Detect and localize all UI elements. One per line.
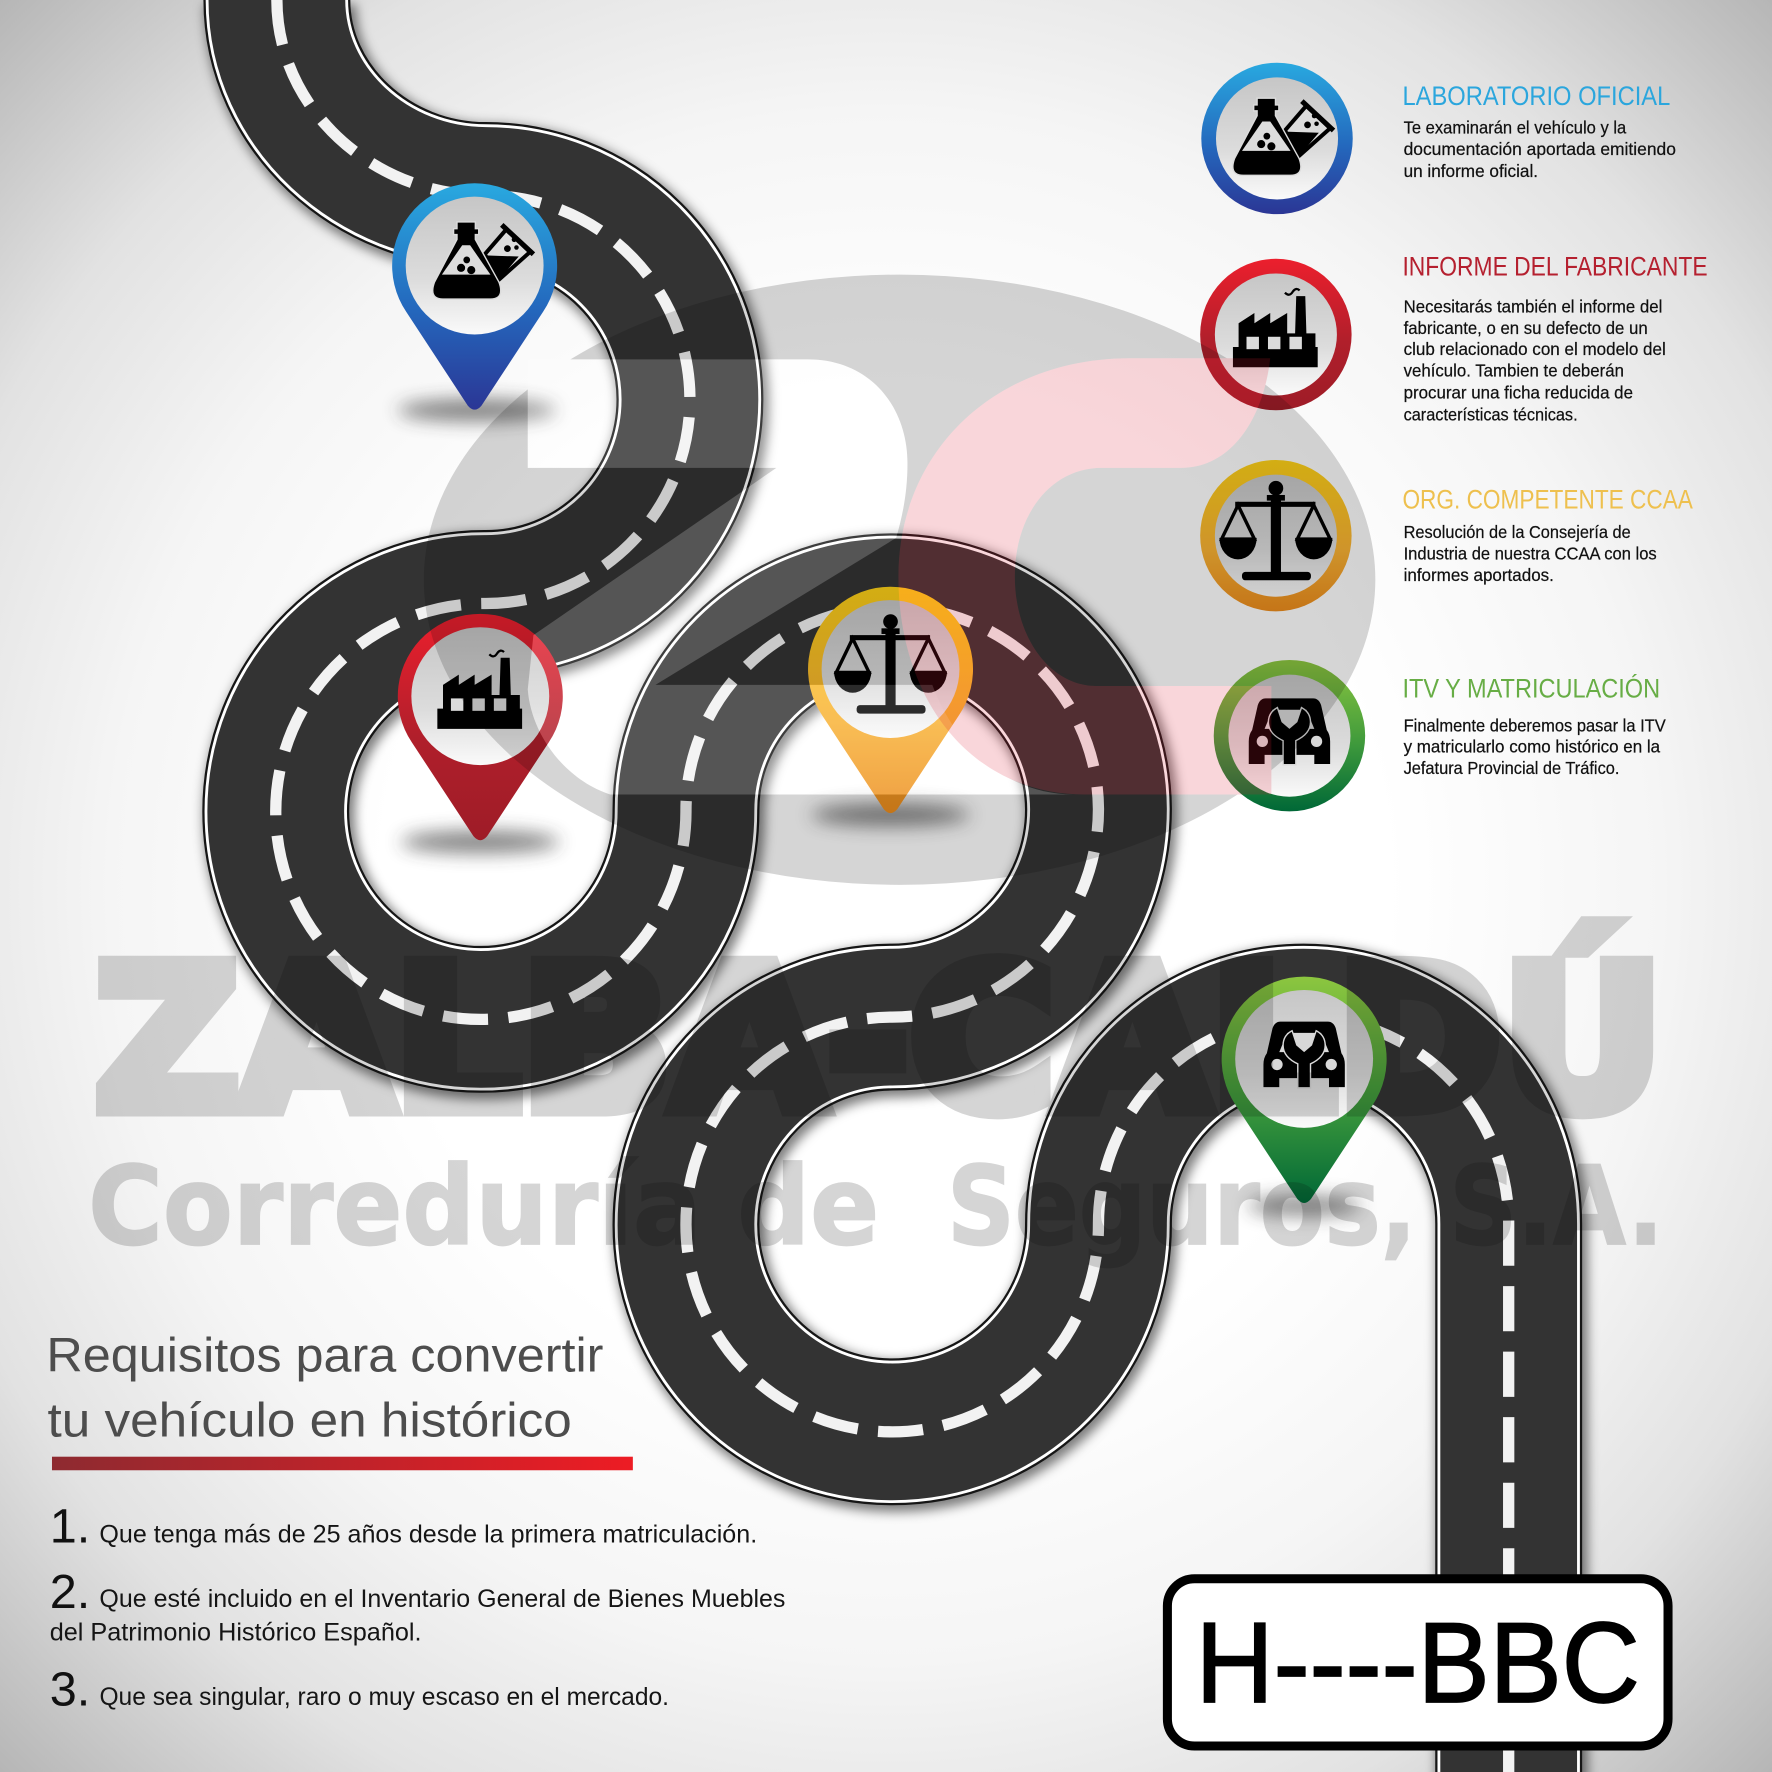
legend icon: fábrica — [1200, 259, 1352, 410]
legend icon: coche y llave — [1214, 660, 1365, 811]
text block: informe del fabricante: INFORME DEL FABRICANTE — [1402, 251, 1708, 282]
requirements list — [50, 1500, 785, 1716]
legend icon: laboratorio — [1201, 63, 1353, 214]
text block: laboratorio oficial: un informe oficial. — [1404, 161, 1538, 181]
text block: organismo competente: Resolución de la Consejería de — [1404, 522, 1631, 542]
pin: organismo competente — [808, 587, 973, 826]
text block: informe del fabricante — [1402, 251, 1708, 424]
requirements list: Que sea singular, raro o muy escaso en el mercado. — [99, 1683, 669, 1711]
requirements list: Que tenga más de 25 años desde la primera matriculación. — [99, 1521, 757, 1549]
text block: informe del fabricante: fabricante, o en su defecto de un — [1404, 318, 1648, 338]
heading: Requisitos para convertir — [46, 1329, 603, 1382]
text block: informe del fabricante: procurar una ficha reducida de — [1404, 382, 1633, 402]
text block: organismo competente: ORG. COMPETENTE CCAA — [1402, 484, 1694, 515]
requirements list: 1. — [50, 1500, 90, 1554]
watermark: company logo and name: Seguros, S.A. — [947, 1143, 1664, 1270]
licence plate: H----BBC — [1196, 1600, 1640, 1727]
heading: tu vehículo en histórico — [47, 1394, 572, 1447]
watermark: company logo and name: Correduría de — [88, 1143, 879, 1270]
text block: organismo competente — [1402, 484, 1694, 585]
pin: laboratorio oficial — [392, 183, 557, 422]
text block: ITV y matriculación: ITV Y MATRICULACIÓN — [1402, 672, 1660, 703]
text block: laboratorio oficial: LABORATORIO OFICIAL — [1402, 80, 1670, 111]
text block: laboratorio oficial — [1402, 80, 1676, 181]
text block: ITV y matriculación — [1402, 672, 1666, 778]
text block: organismo competente: informes aportados. — [1404, 565, 1554, 585]
heading — [46, 1329, 603, 1447]
watermark: company logo and name: ZALBA-CALDÚ — [95, 923, 1664, 1156]
legend icon: balanza — [1200, 460, 1352, 611]
text block: informe del fabricante: características técnicas. — [1404, 404, 1578, 424]
text block: ITV y matriculación: Jefatura Provincial de Tráfico. — [1404, 758, 1619, 778]
requirements list: 2. — [50, 1565, 90, 1619]
text block: informe del fabricante: vehículo. Tambien te deberán — [1404, 360, 1624, 380]
red divider bar — [52, 1457, 633, 1470]
text block: laboratorio oficial: documentación aportada emitiendo — [1404, 139, 1676, 159]
requirements list: 3. — [50, 1662, 90, 1716]
text block: organismo competente: Industria de nuestra CCAA con los — [1404, 543, 1657, 563]
requirements list: del Patrimonio Histórico Español. — [50, 1618, 422, 1646]
text block: informe del fabricante: club relacionado con el modelo del — [1404, 339, 1666, 359]
pin: ITV y matriculación — [1222, 977, 1387, 1216]
pin: informe del fabricante — [398, 614, 563, 853]
requirements list: Que esté incluido en el Inventario General de Bienes Muebles — [99, 1585, 785, 1613]
winding road — [276, 0, 1512, 1772]
watermark: company logo and name — [88, 275, 1664, 1270]
text block: ITV y matriculación: Finalmente deberemos pasar la ITV — [1404, 716, 1666, 736]
text block: laboratorio oficial: Te examinarán el vehículo y la — [1404, 117, 1626, 137]
text block: ITV y matriculación: y matricularlo como histórico en la — [1404, 737, 1660, 757]
text block: informe del fabricante: Necesitarás también el informe del — [1404, 296, 1662, 316]
